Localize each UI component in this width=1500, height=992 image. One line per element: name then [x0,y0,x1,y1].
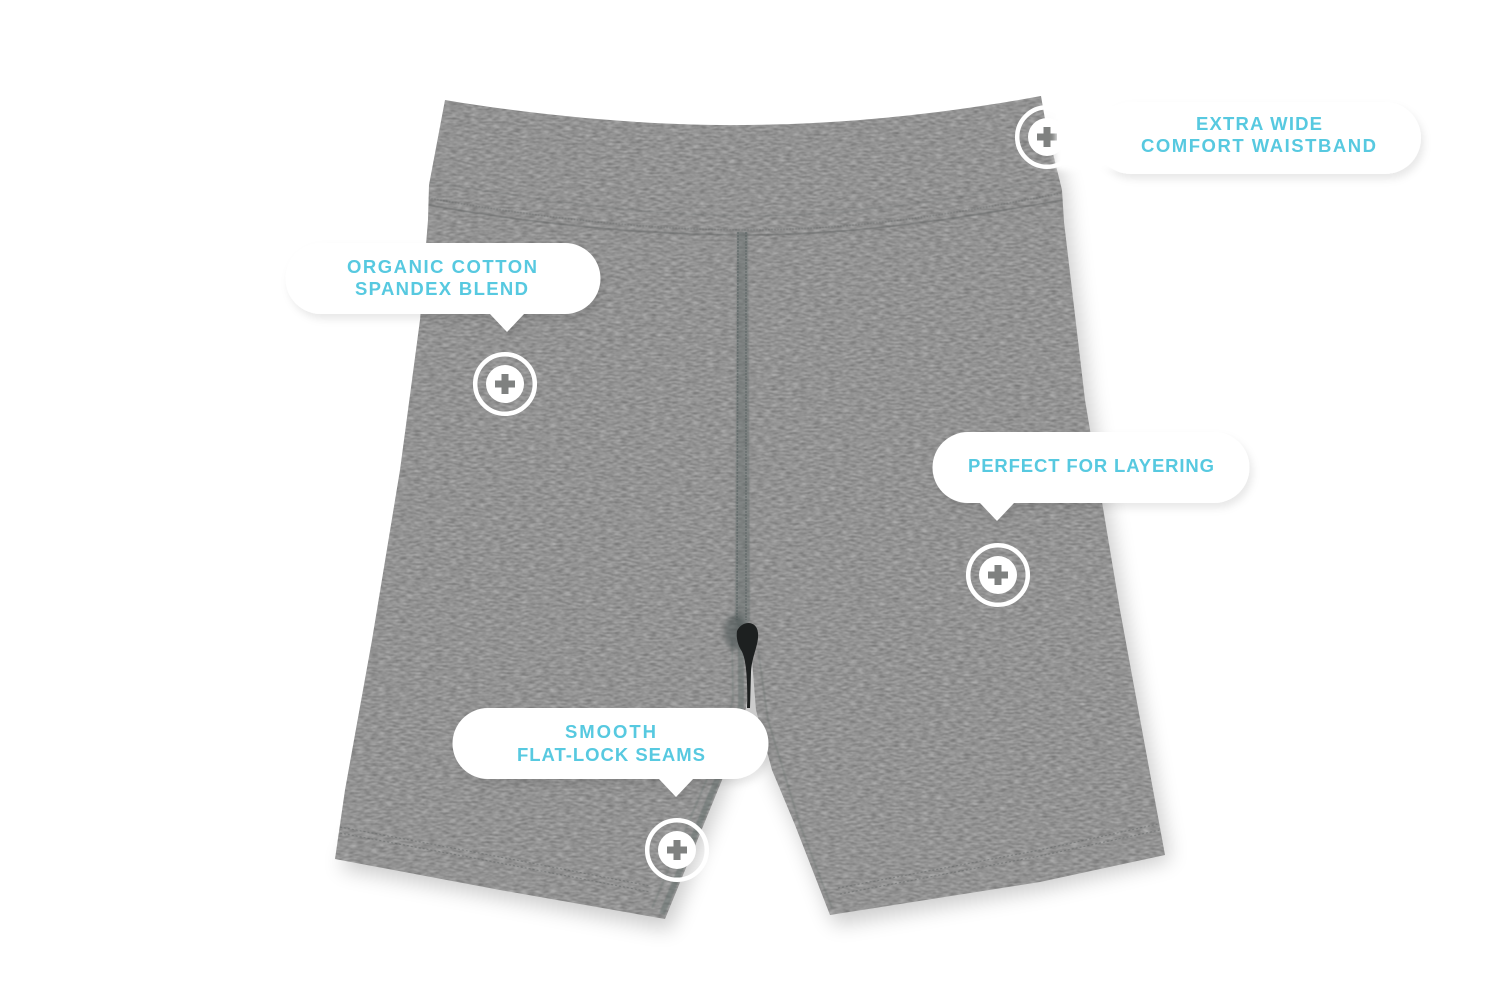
crotch gap [737,623,758,708]
callout: smooth flat-lock seams: SMOOTH [565,721,656,742]
callout: perfect for layering [932,432,1250,521]
callout: perfect for layering: PERFECT FOR LAYERING [968,455,1214,476]
garment shadow [340,125,1170,930]
inseam stitching [652,640,832,914]
centre seam [735,232,750,632]
crotch shading [725,614,747,650]
callout: extra wide comfort waistband: EXTRA WIDE [1196,113,1322,134]
shorts product photo [320,90,1180,930]
callout: smooth flat-lock seams [452,708,768,797]
callout: extra wide comfort waistband [1056,102,1421,174]
marker: waistband [1017,107,1077,167]
callout: extra wide comfort waistband: COMFORT WAISTBAND [1141,135,1376,156]
waistband seams [428,178,1063,235]
callout: organic cotton spandex blend [286,243,600,332]
marker: layering [968,545,1028,605]
garment fabric [320,90,1180,930]
marker: fabric blend [475,354,535,414]
marker: seams [647,820,707,880]
callout: smooth flat-lock seams: FLAT-LOCK SEAMS [517,744,705,765]
callout: organic cotton spandex blend: SPANDEX BLEND [355,278,528,299]
callout: organic cotton spandex blend: ORGANIC COTTON [347,256,537,277]
hem stitching [340,824,1160,894]
